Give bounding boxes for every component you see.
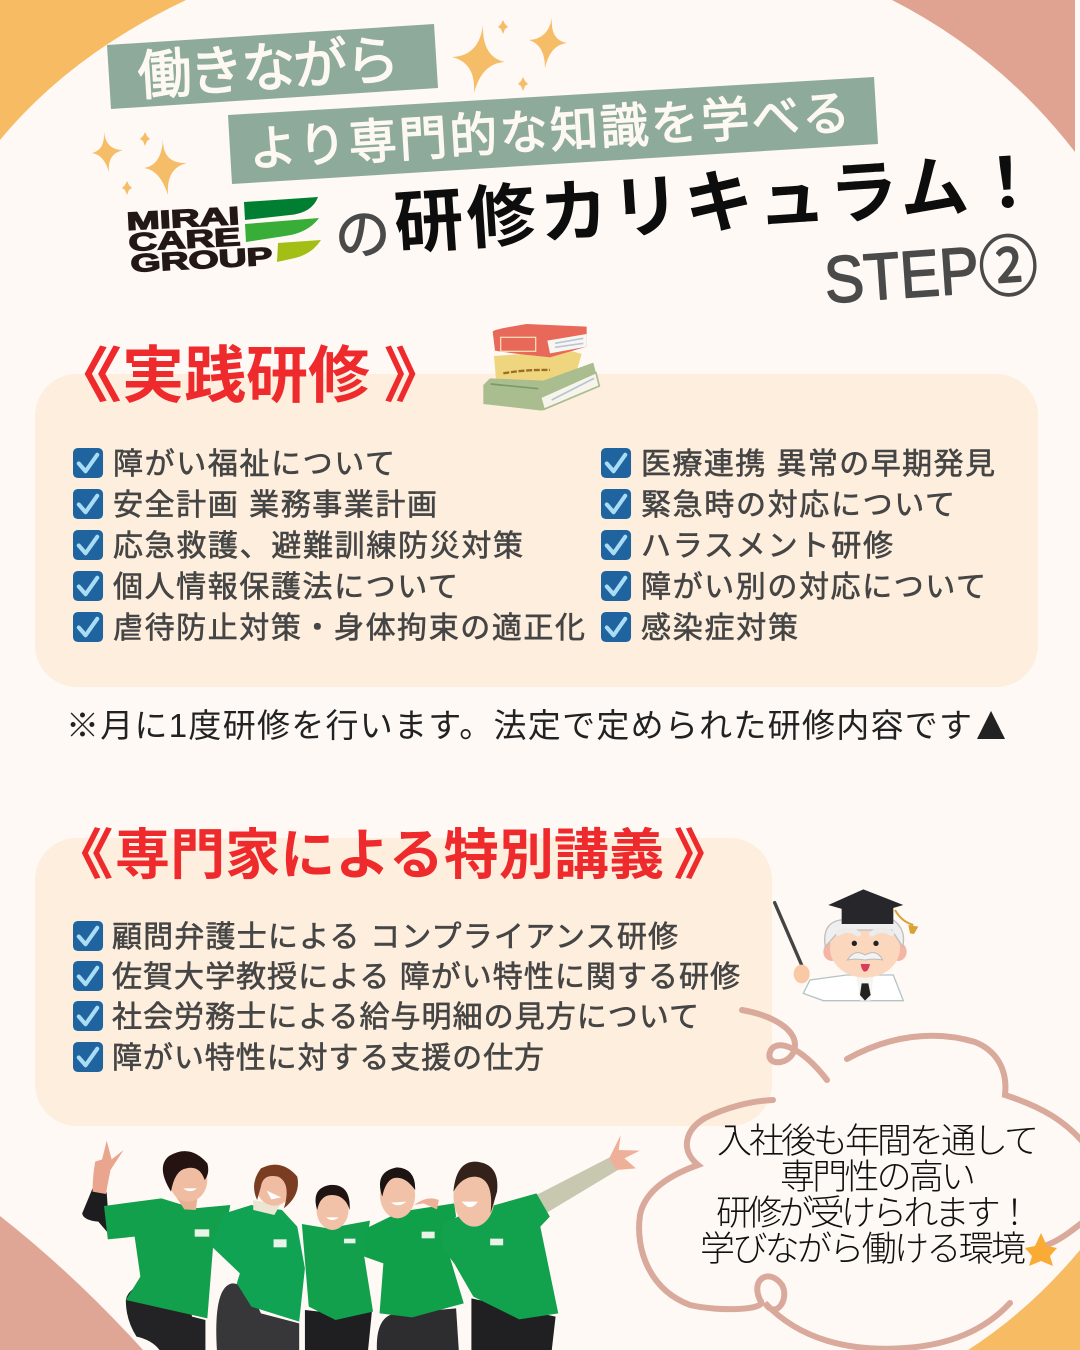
person 5 (443, 1135, 640, 1350)
heading: practical training: 》 (384, 344, 450, 410)
photo: five staff members in green shirts (82, 1135, 640, 1350)
heading band: learn specialist knowledge: より専門的な知識を学べる (247, 87, 852, 177)
icon: stacked books (483, 324, 599, 411)
checklist: right column: 医療連携 異常の早期発見 (641, 448, 995, 481)
checklist: right column: 障がい別の対応について (641, 571, 986, 604)
note: monthly training (66, 697, 1015, 750)
heading: practical training: 《 (44, 343, 122, 410)
checklist: lectures: 障がい特性に対する支援の仕方 (112, 1042, 544, 1075)
callout text: 入社後も年間を通して (717, 1122, 1039, 1161)
checklist: right column: 感染症対策 (641, 612, 798, 645)
corner: bottom-right orange (968, 1250, 1080, 1350)
person 1 (82, 1141, 230, 1350)
checklist: right column: ハラスメント研修 (641, 530, 893, 563)
icon: star (1025, 1233, 1057, 1266)
sparkles: upper (452, 18, 567, 93)
callout text (700, 1122, 1039, 1269)
checklist: lectures (73, 921, 740, 1075)
corner: top-right pink (892, 0, 1075, 152)
title: training curriculum: 研修カリキュラム！ (392, 143, 1044, 263)
corner: bottom-left pink (0, 1216, 143, 1350)
panel: practical training (35, 324, 1038, 687)
callout text: 専門性の高い (780, 1158, 976, 1197)
person 3 (302, 1185, 373, 1350)
logo: Mirai Care Group: CARE (128, 223, 241, 257)
checklist: right column: 緊急時の対応について (641, 489, 955, 522)
sparkles: lower (92, 132, 187, 195)
callout text: 学びながら働ける環境 (700, 1230, 1026, 1269)
person 4 (364, 1167, 464, 1350)
checklist: lectures: 佐賀大学教授による 障がい特性に関する研修 (112, 961, 740, 994)
checklist: left column: 応急救護、避難訓練防災対策 (113, 530, 523, 563)
heading: practical training (44, 342, 450, 411)
checklist: right column (601, 448, 995, 645)
checklist: lectures: 顧問弁護士による コンプライアンス研修 (112, 921, 678, 954)
note: monthly training: ▲ (967, 697, 1015, 750)
heading: practical training: 実践研修 (122, 342, 370, 411)
panel: special lectures (35, 824, 772, 1126)
logo: Mirai Care Group: GROUP (130, 243, 273, 278)
step label: STEP② (822, 228, 1040, 317)
title: の: の (332, 201, 393, 268)
checklist: left column (73, 448, 585, 645)
heading: special lectures: 専門家による特別講義 (115, 824, 664, 886)
callout text: 研修が受けられます！ (716, 1194, 1032, 1233)
icon: professor with pointer (775, 889, 918, 1001)
speech cloud (639, 1010, 1080, 1349)
checklist: left column: 安全計画 業務事業計画 (113, 489, 437, 522)
logo: Mirai Care Group: MIRAI (126, 202, 240, 236)
logo: Mirai Care Group (126, 197, 321, 278)
checklist: lectures: 社会労務士による給与明細の見方について (112, 1001, 699, 1034)
heading band: working while: 働きながら (136, 30, 401, 107)
heading: special lectures: 》 (673, 824, 737, 886)
note: monthly training: ※月に1度研修を行います。法定で定められた研修内容です (66, 707, 972, 744)
checklist: left column: 個人情報保護法について (113, 571, 458, 604)
corner: top-left orange (0, 0, 186, 140)
person 2 (211, 1164, 305, 1350)
checklist: left column: 障がい福祉について (113, 448, 395, 481)
heading: special lectures: 《 (48, 824, 114, 886)
checklist: left column: 虐待防止対策・身体拘束の適正化 (113, 612, 585, 645)
